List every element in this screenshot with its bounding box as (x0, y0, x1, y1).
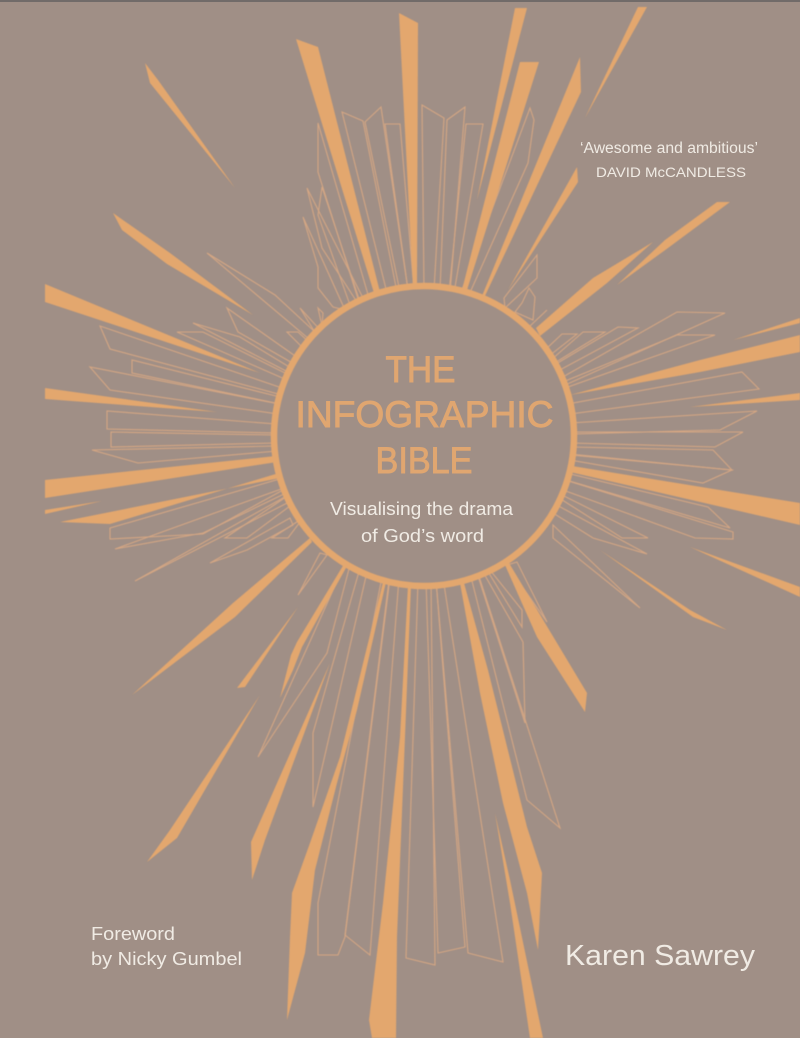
foreword credit: Foreword (91, 924, 175, 944)
subtitle (330, 499, 514, 546)
central ring (274, 286, 574, 586)
author name: Karen Sawrey (565, 940, 756, 972)
endorsement quote (580, 140, 758, 180)
title: BIBLE (376, 439, 472, 481)
title: THE (386, 348, 456, 390)
outlined rays (90, 105, 759, 965)
foreword credit: by Nicky Gumbel (91, 949, 242, 969)
endorsement quote: ‘Awesome and ambitious’ (580, 140, 758, 157)
foreword credit (91, 924, 242, 969)
title (296, 348, 554, 481)
subtitle: of God’s word (361, 526, 484, 546)
title: INFOGRAPHIC (296, 393, 554, 435)
subtitle: Visualising the drama (330, 499, 514, 519)
endorsement quote: DAVID McCANDLESS (596, 164, 746, 180)
